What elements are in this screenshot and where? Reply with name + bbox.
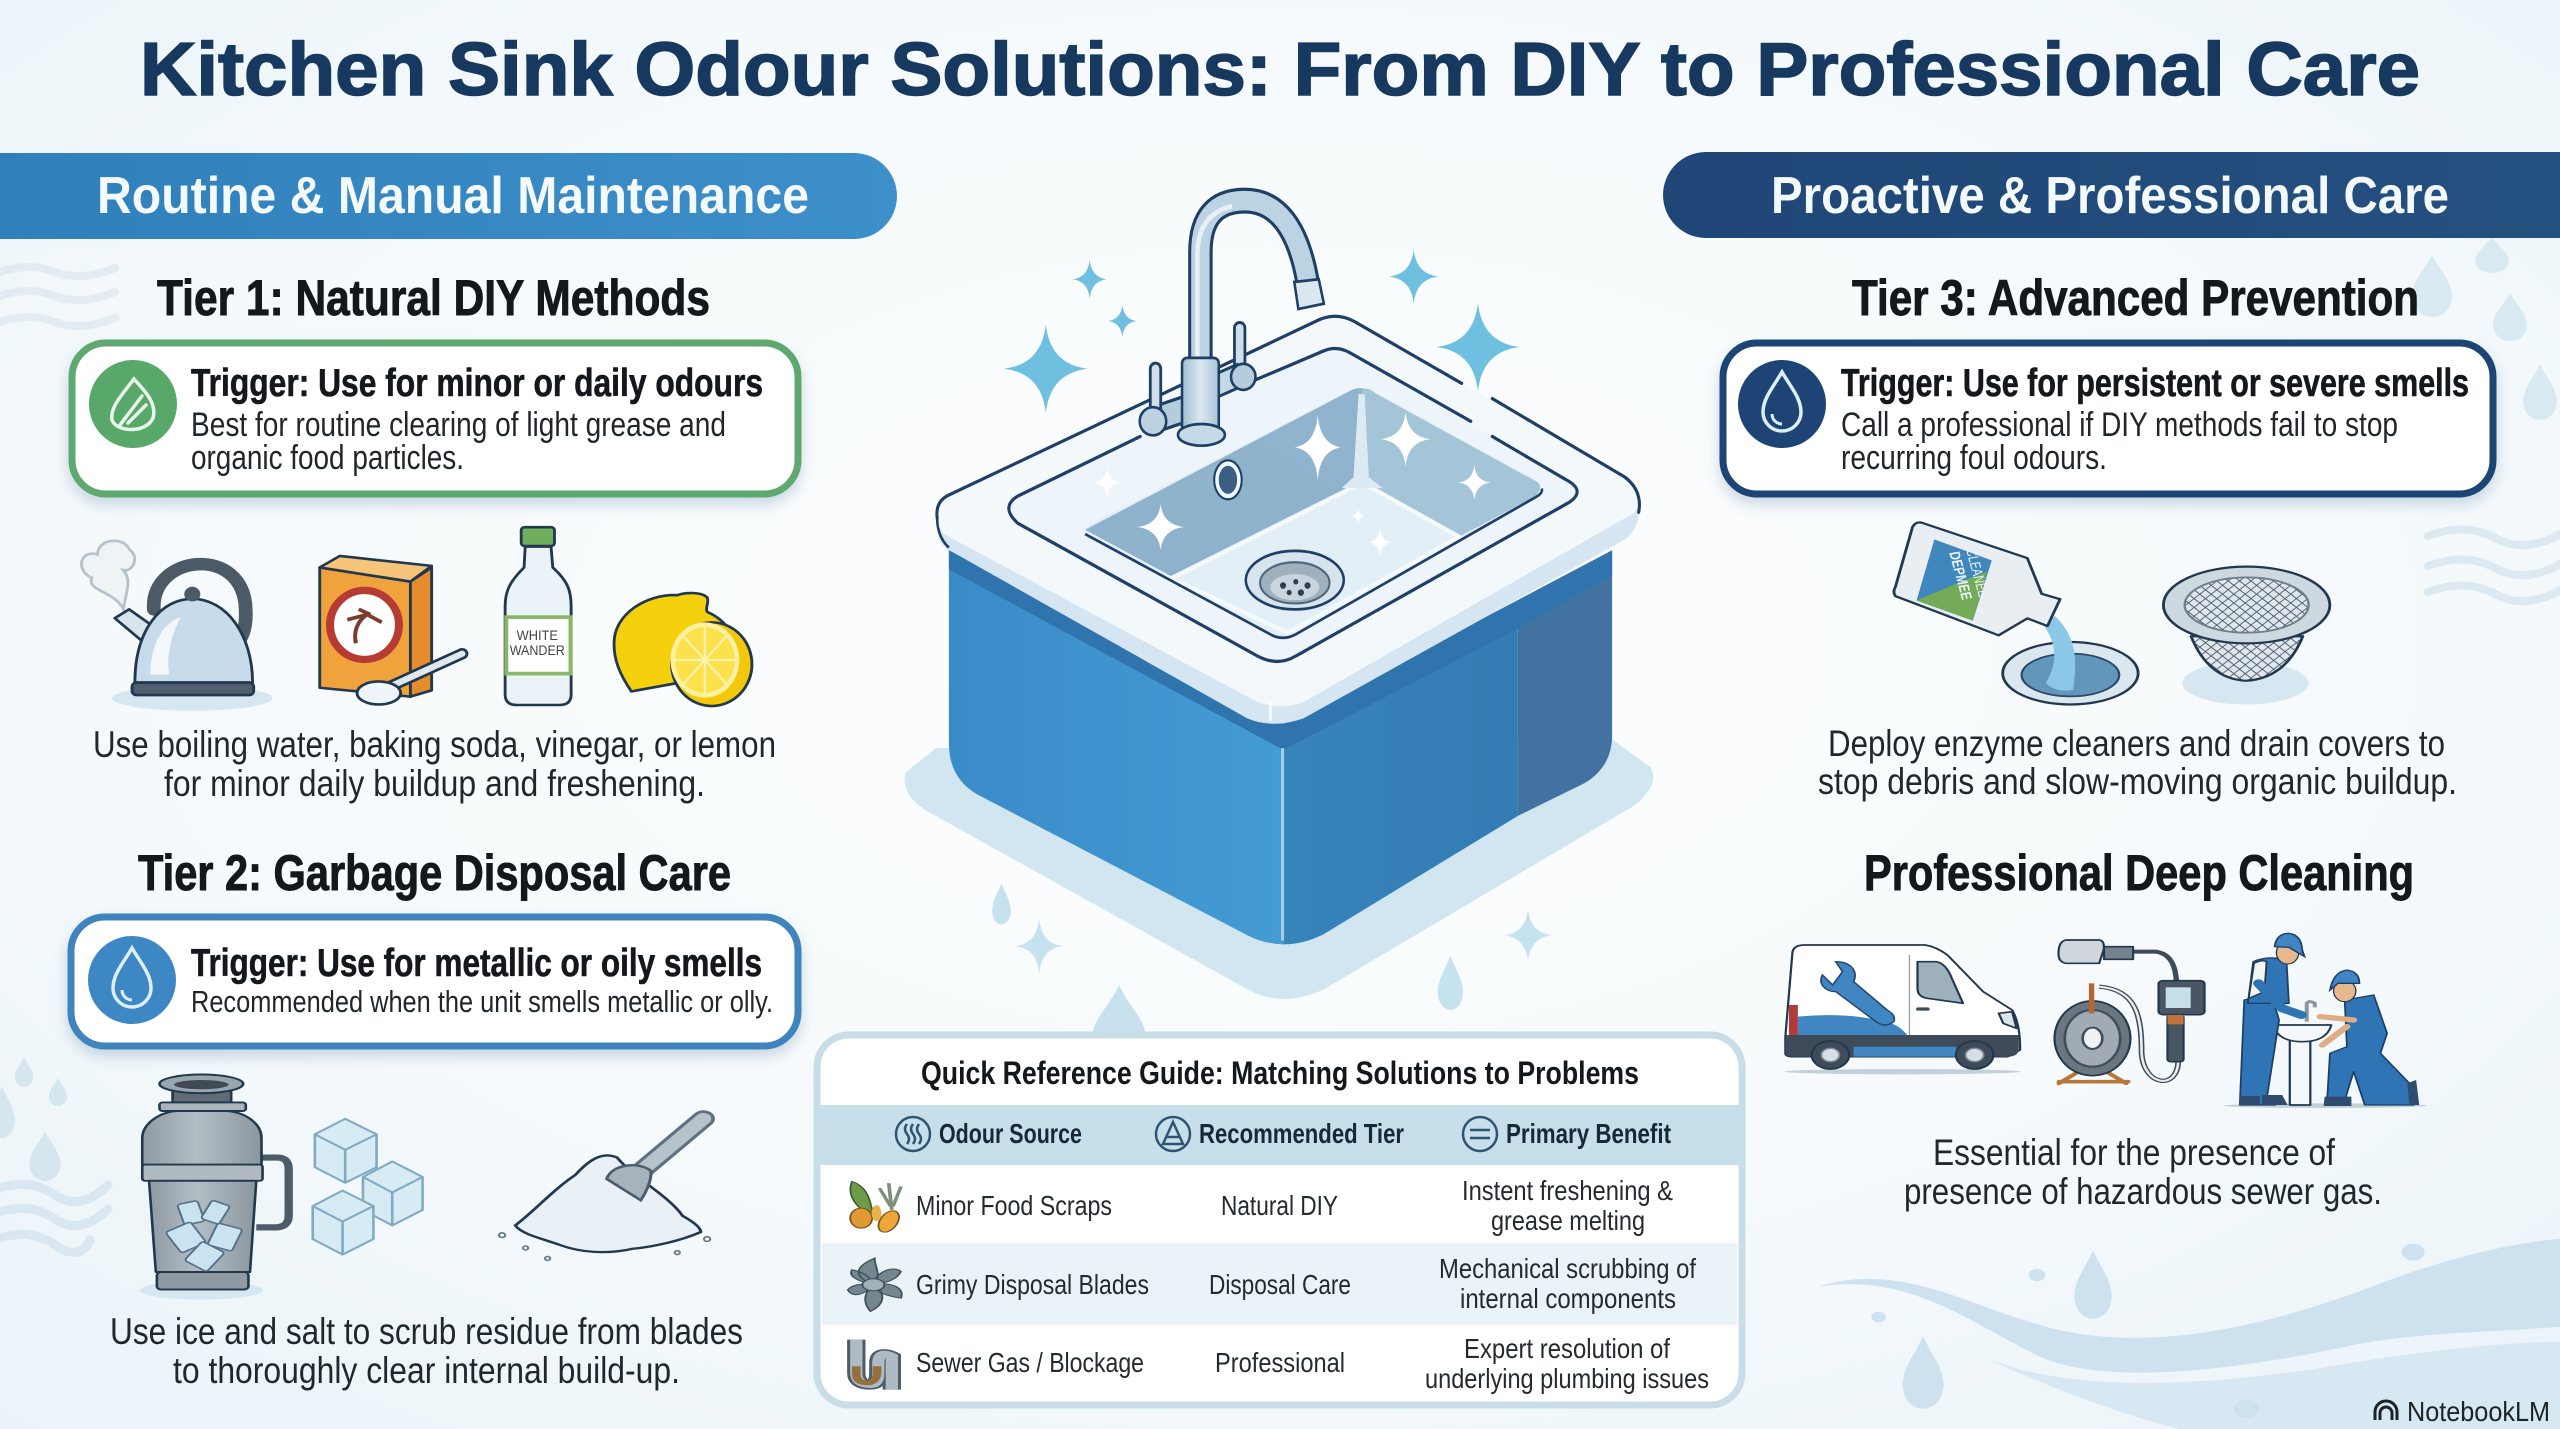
- body text: tier 1: Use boiling water, baking soda, vinegar, or lemon: [93, 724, 776, 765]
- icon: wrench on van: [1821, 962, 1894, 1025]
- label text: WANDER: [510, 643, 565, 659]
- row: minor food scraps: Minor Food Scraps: [916, 1190, 1112, 1221]
- banner: proactive and professional care: Proactive & Professional Care: [1771, 167, 2449, 225]
- row: grimy disposal blades: [848, 1253, 1696, 1314]
- sparkles white: [1094, 412, 1491, 556]
- row: grimy disposal blades: Grimy Disposal Blades: [916, 1269, 1149, 1300]
- cabinet left face: [949, 550, 1283, 944]
- row: minor food scraps: [850, 1175, 1673, 1236]
- body text: professional: Essential for the presence of: [1933, 1132, 2336, 1173]
- icon: vinegar bottle: [505, 527, 571, 705]
- icon: benefit: [1463, 1117, 1497, 1151]
- icon: garbage disposal with ice: [140, 1075, 289, 1300]
- icon: leaf drop: [89, 360, 177, 448]
- floor shadow: [905, 737, 1653, 999]
- cabinet top shadow band: [949, 550, 1612, 750]
- icon: p-trap pipe: [856, 1340, 892, 1390]
- cabinet far right shade: [1518, 550, 1612, 816]
- trigger text: Trigger: Use for minor or daily odours: [191, 362, 763, 405]
- banner: proactive and professional care: [1663, 152, 2560, 238]
- table row 2 shade: [822, 1243, 1737, 1325]
- trigger text: Trigger: Use for metallic or oily smells: [191, 942, 762, 985]
- sparkles blue: [1004, 249, 1520, 413]
- trigger description: [191, 406, 726, 477]
- panel: tier 2 trigger: [71, 917, 798, 1046]
- basin: [1085, 388, 1542, 638]
- banner: routine and manual maintenance: Routine & Manual Maintenance: [97, 167, 809, 225]
- body text: tier 1: [93, 724, 776, 804]
- icon: salt pile and scoop: [499, 1119, 710, 1260]
- icon: water drop: [88, 936, 176, 1024]
- header labels: Odour Source: [939, 1118, 1082, 1149]
- row: sewer gas blockage: Professional: [1215, 1347, 1345, 1378]
- banner: routine and manual maintenance: [0, 153, 897, 239]
- sink rim: [1009, 348, 1577, 661]
- overflow hole: [1217, 464, 1239, 496]
- label text: WHITE: [517, 629, 558, 644]
- row: grimy disposal blades: Disposal Care: [1209, 1269, 1351, 1300]
- trigger description: Call a professional if DIY methods fail to stop: [1841, 406, 2398, 444]
- icon: service van: [1784, 945, 2021, 1074]
- benefit text: grease melting: [1491, 1205, 1645, 1236]
- panel: tier 3 trigger: [1723, 343, 2493, 494]
- panel: quick reference table: [817, 1035, 1742, 1405]
- benefit text: internal components: [1460, 1283, 1676, 1314]
- bottle label: [1946, 548, 1992, 601]
- benefit text: [1462, 1175, 1673, 1236]
- trigger description: recurring foul odours.: [1841, 439, 2107, 477]
- body text: tier 2: to thoroughly clear internal build-up.: [173, 1350, 680, 1391]
- trigger description: Best for routine clearing of light grease and: [191, 406, 726, 444]
- icon: drain strainer: [2163, 567, 2330, 704]
- panel: tier 1 trigger: [72, 343, 798, 494]
- icon: drain camera reel: [2055, 940, 2205, 1083]
- kneeling plumber: [2320, 970, 2419, 1106]
- faucet: [1140, 201, 1324, 446]
- heading: tier 1: Tier 1: Natural DIY Methods: [157, 270, 710, 326]
- standing plumber: [2239, 933, 2305, 1105]
- header labels: [939, 1118, 1671, 1149]
- row: sewer gas blockage: [856, 1333, 1709, 1394]
- countertop: [937, 316, 1639, 724]
- decorative waves: right bottom: [1818, 1239, 2560, 1429]
- benefit text: Expert resolution of: [1464, 1333, 1670, 1364]
- body text: tier 2: [110, 1311, 743, 1391]
- icon: baking soda box: [320, 556, 462, 704]
- icon: drain with cleaner stream: [2003, 616, 2138, 704]
- decorative drop above table: [1092, 985, 1146, 1036]
- benefit text: [1439, 1253, 1696, 1314]
- decorative waves and drops: right upper: [2412, 237, 2560, 601]
- row: minor food scraps: Natural DIY: [1221, 1190, 1338, 1221]
- body text: tier 3: stop debris and slow-moving organic buildup.: [1818, 761, 2457, 802]
- table header row: [818, 1105, 1741, 1165]
- table title: Quick Reference Guide: Matching Solutions to Problems: [921, 1055, 1639, 1091]
- decorative waves and drops: left lower: [0, 1057, 108, 1252]
- sparkles and drops below: [992, 883, 1551, 1010]
- header labels: Recommended Tier: [1199, 1118, 1404, 1149]
- icon: water drop: [1738, 360, 1826, 448]
- body text: tier 1: for minor daily buildup and freshening.: [164, 763, 705, 804]
- decorative waves and drops: left upper: [0, 267, 115, 326]
- cabinet right face: [1283, 610, 1518, 944]
- benefit text: Mechanical scrubbing of: [1439, 1253, 1696, 1284]
- row: sewer gas blockage: Sewer Gas / Blockage: [916, 1347, 1144, 1378]
- body text: tier 2: Use ice and salt to scrub residue from blades: [110, 1311, 743, 1352]
- heading: professional deep cleaning: Professional Deep Cleaning: [1864, 845, 2414, 901]
- heading: tier 2: Tier 2: Garbage Disposal Care: [138, 845, 731, 901]
- label text: [510, 629, 565, 659]
- trigger description: organic food particles.: [191, 439, 464, 477]
- icon: odour source: [896, 1117, 930, 1151]
- icon: ice cubes: [313, 1119, 423, 1255]
- central sink illustration: [905, 201, 1653, 1010]
- body text: tier 3: Deploy enzyme cleaners and drain covers to: [1828, 723, 2445, 764]
- drain: [1246, 551, 1344, 609]
- benefit text: [1425, 1333, 1709, 1394]
- icon: lemon: [614, 593, 752, 706]
- icon: plumbers at pedestal sink: [2224, 933, 2427, 1108]
- icon: kettle: [81, 541, 273, 711]
- heading: tier 3: Tier 3: Advanced Prevention: [1852, 270, 2419, 326]
- body text: professional: [1904, 1132, 2382, 1212]
- benefit text: Instent freshening &: [1462, 1175, 1673, 1206]
- header labels: Primary Benefit: [1506, 1118, 1671, 1149]
- bottle label: DEPMEE: [1946, 550, 1975, 601]
- icons: tier 2 disposal items: [140, 1075, 710, 1300]
- icon: enzyme cleaner bottle: [1894, 522, 2060, 635]
- icons: tier 3 prevention: [1894, 522, 2330, 704]
- icons: tier 1 natural remedies: [81, 527, 752, 711]
- benefit text: underlying plumbing issues: [1425, 1363, 1709, 1394]
- body text: tier 3: [1818, 723, 2457, 802]
- title: Kitchen Sink Odour Solutions: From DIY to Professional Care: [140, 27, 2420, 111]
- trigger description: [1841, 406, 2398, 477]
- icon: food scraps: [850, 1181, 903, 1233]
- icon: tier triangle: [1156, 1117, 1190, 1151]
- trigger description: Recommended when the unit smells metallic or olly.: [191, 984, 773, 1019]
- body text: professional: presence of hazardous sewer gas.: [1904, 1171, 2382, 1212]
- icon: blades: [848, 1258, 902, 1311]
- bottle label: CLEANEE: [1963, 548, 1992, 598]
- icons: professional cleaning: [1784, 933, 2427, 1108]
